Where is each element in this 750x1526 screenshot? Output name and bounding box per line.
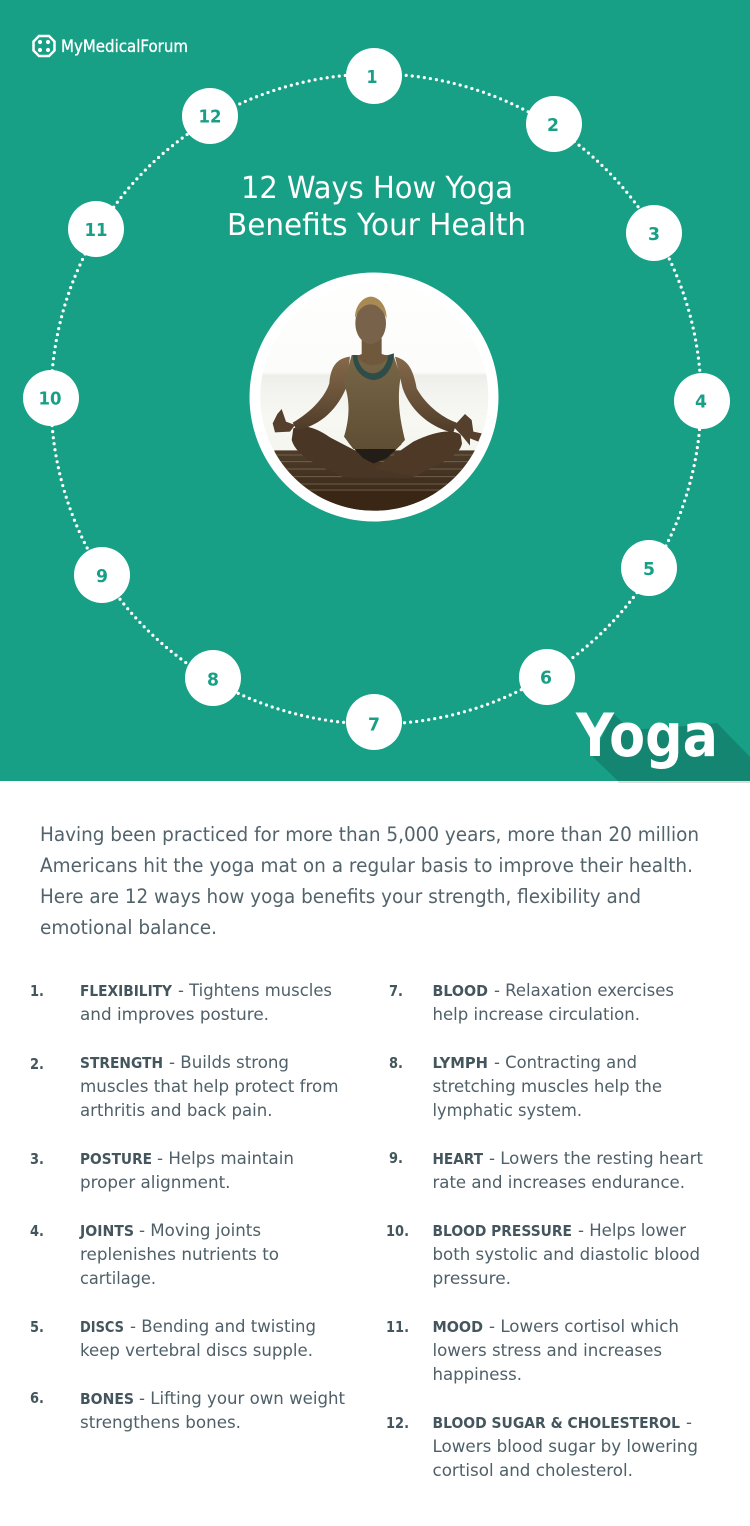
marker 10 [23,370,79,426]
item 12 blood sugar and cholesterol: cortisol and cholesterol. [432,1461,633,1480]
marker 5 [621,540,677,596]
item 9 heart [389,1149,704,1192]
item 4 joints [30,1221,279,1288]
item 6 bones: - Lifting your own weight [139,1389,346,1408]
item 2 strength: STRENGTH [80,1054,163,1072]
item 12 blood sugar and cholesterol [386,1413,698,1480]
marker 6 [519,649,575,705]
item 7 blood: 7. [389,982,403,1000]
marker 9: 9 [96,566,108,587]
item 3 posture: 3. [30,1150,44,1168]
benefits list: left column [30,981,346,1432]
item 8 lymph: LYMPH [432,1054,488,1072]
marker 11: 11 [84,220,108,241]
item 12 blood sugar and cholesterol: 12. [386,1414,409,1432]
item 8 lymph [389,1053,662,1120]
marker 12: 12 [198,106,222,128]
intro paragraph: emotional balance. [40,916,217,939]
item 11 mood: happiness. [432,1365,522,1384]
marker 9 [74,547,130,603]
marker 5: 5 [643,559,655,580]
item 5 discs: DISCS [80,1318,124,1336]
item 7 blood: BLOOD [432,982,488,1000]
intro paragraph [40,823,699,939]
item 11 mood: 11. [386,1318,409,1336]
panel: green hero header [0,0,750,783]
deck [274,450,475,513]
marker 3 [626,205,682,261]
item 7 blood [389,981,674,1024]
marker 8: 8 [207,670,219,690]
item 7 blood: - Relaxation exercises [494,981,674,1000]
marker 7: 7 [368,714,380,736]
marker 2: 2 [547,115,559,136]
item 10 blood pressure: - Helps lower [578,1221,686,1240]
title [227,171,526,243]
title: Benefits Your Health [227,208,526,243]
marker 4 [674,373,730,429]
item 2 strength: 2. [30,1055,44,1073]
item 2 strength: muscles that help protect from [80,1077,338,1096]
item 1 flexibility: and improves posture. [80,1005,269,1024]
item 2 strength: - Builds strong [169,1053,289,1072]
item 3 posture: proper alignment. [80,1173,230,1192]
item 6 bones: BONES [80,1390,134,1408]
hands [273,409,295,432]
item 5 discs: - Bending and twisting [130,1317,316,1336]
marker 12 [182,88,238,144]
marker 11 [68,201,124,257]
item 8 lymph: lymphatic system. [432,1101,582,1120]
marker 1 [346,48,402,104]
item 10 blood pressure: 10. [386,1222,409,1240]
photo: woman meditating in circular frame [250,272,498,522]
marker 7 [346,694,402,750]
decorative dotted ring [51,74,701,724]
item 11 mood: MOOD [432,1318,483,1336]
marker 2 [526,96,582,152]
item 10 blood pressure: both systolic and diastolic blood [432,1245,700,1264]
item 11 mood: lowers stress and increases [432,1341,662,1360]
item 4 joints: cartilage. [80,1269,156,1288]
item 7 blood: help increase circulation. [432,1005,640,1024]
item 3 posture: POSTURE [80,1150,152,1168]
item 5 discs [30,1317,316,1360]
marker 6: 6 [540,668,552,688]
item 3 posture: - Helps maintain [157,1149,294,1168]
item 4 joints: 4. [30,1222,44,1240]
item 4 joints: JOINTS [79,1222,134,1240]
item 10 blood pressure: pressure. [432,1269,511,1288]
marker 4: 4 [695,392,707,412]
item 4 joints: - Moving joints [139,1221,261,1240]
item 9 heart: - Lowers the resting heart [489,1149,704,1168]
figure [292,426,415,478]
item 8 lymph: stretching muscles help the [432,1077,662,1096]
item 6 bones: 6. [30,1389,44,1407]
item 11 mood [386,1317,679,1384]
item 4 joints: replenishes nutrients to [80,1245,279,1264]
item 12 blood sugar and cholesterol: Lowers blood sugar by lowering [432,1437,698,1456]
item 5 discs: 5. [30,1318,44,1336]
item 3 posture [30,1149,294,1192]
item 1 flexibility [30,981,332,1024]
marker 8 [185,650,241,706]
intro paragraph: Americans hit the yoga mat on a regular basis to improve their health. [40,854,693,877]
item 6 bones: strengthens bones. [80,1413,241,1432]
benefits list: right column [386,981,704,1480]
intro paragraph: Here are 12 ways how yoga benefits your strength, flexibility and [40,885,641,908]
icon: logo cross mark [34,36,54,56]
item 12 blood sugar and cholesterol: - [686,1413,692,1432]
item 11 mood: - Lowers cortisol which [489,1317,679,1336]
item 1 flexibility: 1. [30,982,44,1000]
item 1 flexibility: FLEXIBILITY [80,982,173,1000]
numbered markers around ring [23,48,730,750]
item 1 flexibility: - Tightens muscles [178,981,332,1000]
item 2 strength [30,1053,338,1120]
item 2 strength: arthritis and back pain. [80,1101,272,1120]
item 10 blood pressure: BLOOD PRESSURE [432,1222,572,1240]
item 10 blood pressure [386,1221,700,1288]
item 5 discs: keep vertebral discs supple. [80,1341,313,1360]
item 8 lymph: 8. [389,1054,403,1072]
marker 10: 10 [38,388,62,410]
badge: Yoga with long shadow: Yoga [575,701,718,771]
marker 3: 3 [648,224,660,245]
title: 12 Ways How Yoga [241,171,513,206]
marker 1: 1 [366,67,378,88]
item 9 heart: rate and increases endurance. [432,1173,685,1192]
item 12 blood sugar and cholesterol: BLOOD SUGAR & CHOLESTEROL [432,1414,680,1432]
logo: MyMedicalForum: MyMedicalForum [61,37,188,57]
item 9 heart: HEART [432,1150,483,1168]
item 6 bones [30,1389,346,1432]
intro paragraph: Having been practiced for more than 5,000 years, more than 20 million [40,823,699,846]
item 9 heart: 9. [389,1149,403,1167]
item 8 lymph: - Contracting and [494,1053,637,1072]
